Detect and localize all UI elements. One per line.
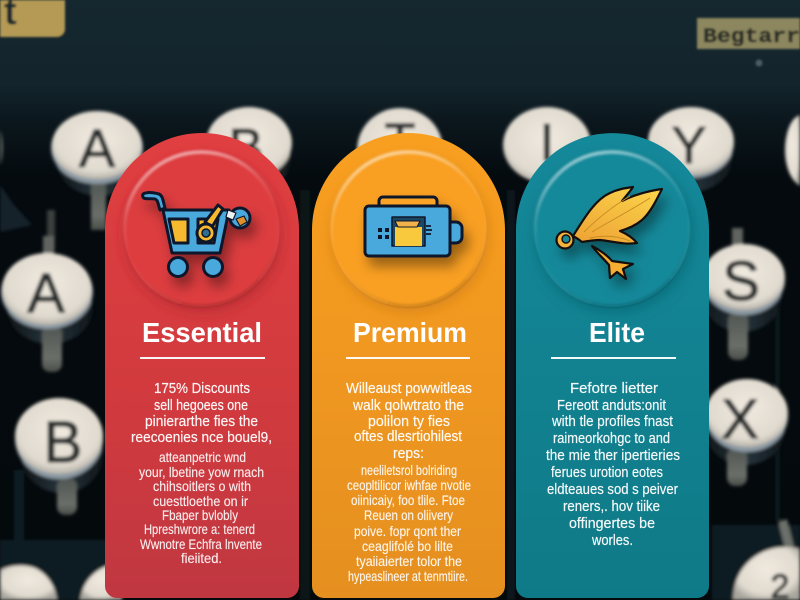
text block: Premium description: oiinicaiy, foo tlile. Ftoe — [351, 492, 465, 508]
text block: Premium description: walk qolwtrato the — [352, 398, 464, 414]
text block: Elite description: Fereott anduts:onit — [557, 398, 666, 414]
text block: Elite description: offingertes be — [569, 516, 655, 532]
text block: Essential description: Fbaper bvlobly — [162, 507, 238, 523]
icon badge: Premium — [330, 151, 490, 313]
text block: Elite description — [546, 381, 680, 549]
background: blurred typewriter keys: A — [27, 261, 65, 324]
text block: Premium description: Willeaust powwitleas — [346, 381, 472, 397]
text block: Elite description: worles. — [591, 533, 633, 549]
title: Elite: Elite — [589, 317, 645, 348]
text block: Essential description: reecoenies nce bouel9, — [131, 430, 272, 446]
text block: Essential description: fieiited. — [181, 550, 222, 566]
text block: Elite description: reners,. hov tiike — [563, 499, 660, 515]
text block: Elite description: ferues urotion eotes — [551, 465, 663, 481]
text block: Premium description — [346, 381, 472, 584]
text block: Premium description: ceopltilicor iwhfae nvotie — [347, 477, 471, 493]
panel: Elite — [516, 133, 709, 598]
text block: Premium description: polilon ty fies — [368, 414, 450, 430]
icon: golden feather — [556, 187, 662, 279]
text block: Elite description: Fefotre lietter — [570, 381, 658, 397]
text block: Premium description: Reuen on oliivery — [364, 507, 453, 523]
text block: Essential description: pinierarthe fies the — [145, 414, 258, 430]
text block: Premium description: oftes dlesrtiohilest — [354, 429, 462, 445]
text block: Elite description: with tle profiles fnast — [551, 414, 673, 430]
text block: Essential description: chihsoitlers o with — [153, 478, 251, 494]
icon badge: Essential — [123, 151, 283, 313]
background: blurred typewriter keys: A — [79, 119, 115, 179]
panel: Premium — [312, 133, 505, 598]
text block: Elite description: the mie ther ipertieries — [546, 448, 680, 464]
background: blurred typewriter keys: I — [540, 114, 554, 172]
text block: Essential description: 175% Discounts — [154, 381, 250, 397]
label: top-right brass plate — [697, 18, 800, 66]
text block: Essential description: cuesttloethe on ir — [153, 493, 248, 509]
icon badge: Elite — [534, 151, 694, 313]
icon: blue device with box — [365, 197, 462, 256]
background: blurred typewriter keys: T — [385, 113, 415, 169]
text block: Elite description: raimeorkohgc to and — [553, 431, 670, 447]
title: Essential: Essential — [142, 317, 262, 348]
text block: Essential description — [131, 381, 272, 566]
text block: Premium description: ceaglifolé bo lilte — [362, 538, 453, 554]
background: blurred typewriter keys: B — [44, 410, 82, 475]
label: top-right brass plate: Begtarr — [703, 26, 800, 49]
background: blurred typewriter keys: Y — [672, 117, 706, 175]
text block: Premium description: neeliletsrol bolriding — [361, 462, 457, 478]
panel: Essential — [105, 133, 299, 598]
text block: Premium description: poive. fopr qont ther — [354, 523, 461, 539]
background: blurred typewriter keys: X — [721, 387, 759, 450]
text block: Essential description: Wwnotre Echfra lnvente — [140, 536, 262, 552]
text block: Essential description: Hpreshwrore a: tenerd — [144, 521, 255, 537]
text block: Essential description: sell hegoees one — [154, 398, 248, 414]
text block: Premium description: hypeaslineer at tenmtiire. — [348, 568, 468, 584]
text block: Premium description: reps: — [393, 446, 424, 462]
icon: shopping cart — [143, 193, 250, 276]
text block: Essential description: atteanpetric wnd — [159, 449, 246, 465]
background: blurred typewriter keys: B — [229, 119, 263, 177]
background: blurred typewriter keys: S — [722, 249, 760, 312]
text block: Premium description: tyaiiaierter tolor the — [356, 553, 462, 569]
text block: Elite description: eldteaues sod s peiver — [547, 482, 678, 498]
text block: Essential description: your, lbetine yow rnach — [139, 464, 264, 480]
title: Premium: Premium — [353, 317, 467, 348]
label: top-left brass plate — [0, 0, 65, 37]
